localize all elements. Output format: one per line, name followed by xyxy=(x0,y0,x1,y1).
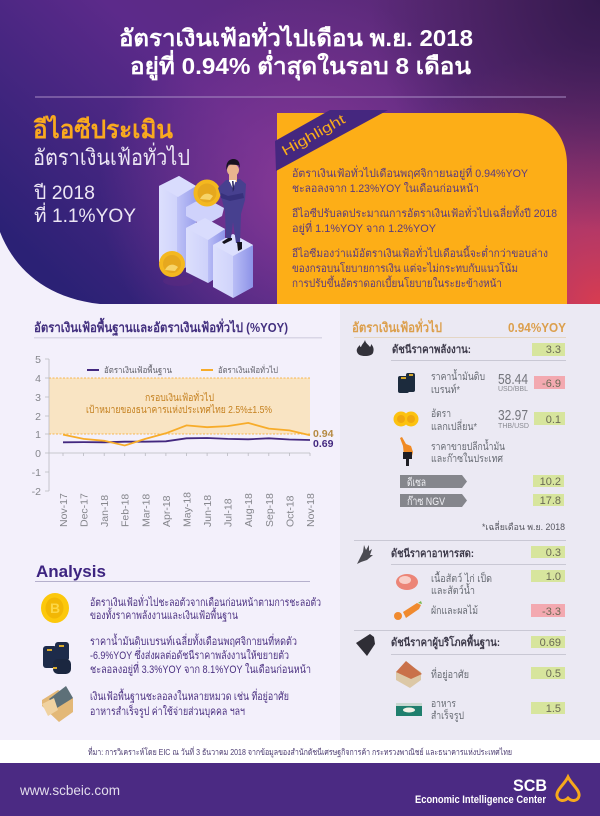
icon: scb logo xyxy=(557,777,579,800)
breakdown heading xyxy=(352,318,566,338)
x axis labels: Jul-18 xyxy=(223,498,235,527)
energy: diesel: 10.2 xyxy=(540,476,561,488)
energy: brent crude: เบรนท์* xyxy=(431,383,460,396)
chart heading: อัตราเงินเฟ้อพื้นฐานและอัตราเงินเฟ้อทั่วไป (%YOY) xyxy=(34,317,288,337)
x axis labels: Feb-18 xyxy=(120,494,132,527)
core: prepared food: 1.5 xyxy=(546,703,561,715)
core: prepared food: สำเร็จรูป xyxy=(431,708,464,722)
x axis labels: Aug-18 xyxy=(243,493,255,527)
highlight text: อัตราเงินเฟ้อทั่วไปเดือนพฤศจิกายนอยู่ที่ 0.94%YOY xyxy=(292,165,529,180)
highlight text xyxy=(292,165,557,290)
breakdown heading: 0.94%YOY xyxy=(508,320,566,335)
core section header xyxy=(356,634,566,656)
source note xyxy=(0,740,600,763)
x axis labels: Sep-18 xyxy=(264,493,276,527)
core: housing: ที่อยู่อาศัย xyxy=(431,667,469,681)
energy: exchange rate: แลกเปลี่ยน* xyxy=(431,419,477,433)
x axis labels: Mar-18 xyxy=(140,494,152,527)
value labels: 0.94 xyxy=(313,428,334,440)
energy: ngv: 17.8 xyxy=(540,495,561,507)
y axis labels: -1 xyxy=(32,467,41,479)
x axis labels: May-18 xyxy=(182,492,194,527)
footer xyxy=(0,763,600,816)
ribbon: highlight: Highlight xyxy=(279,111,348,159)
footnote: *เฉลี่ยเดือน พ.ย. 2018 xyxy=(482,520,565,532)
analysis text 1: ของทั้งราคาพลังงานและเงินเฟ้อพื้นฐาน xyxy=(90,607,238,622)
core: housing: 0.5 xyxy=(546,668,561,680)
food: meat: และสัตว์น้ำ xyxy=(431,583,475,597)
illustration: businessman on columns xyxy=(159,159,253,298)
highlight text: การปรับขึ้นอัตราดอกเบี้ยนโยบายในระยะข้างหน้า xyxy=(292,275,502,290)
x axis labels: Jan-18 xyxy=(99,495,111,527)
x axis labels: Oct-18 xyxy=(284,495,296,527)
core section header: 0.69 xyxy=(540,637,561,649)
series: core inflation xyxy=(63,438,310,442)
title: อัตราเงินเฟ้อทั่วไปเดือน พ.ย. 2018 xyxy=(119,21,473,51)
band label: เป้าหมายของธนาคารแห่งประเทศไทย 2.5%±1.5% xyxy=(86,404,272,416)
highlight text: ของกรอบนโยบายการเงิน แต่จะไม่กระทบกับแนวโน้ม xyxy=(292,261,518,275)
ribbon: highlight xyxy=(275,110,388,171)
eic forecast text xyxy=(33,114,190,227)
food: vegetables xyxy=(394,601,565,620)
y axis labels: 1 xyxy=(35,429,41,441)
right panel background xyxy=(340,304,600,740)
y axis labels: -2 xyxy=(32,486,41,498)
energy: retail fuel: และก๊าซในประเทศ xyxy=(431,452,503,465)
analysis text 2 xyxy=(90,633,311,676)
x axis labels xyxy=(58,492,317,527)
scb wordmark xyxy=(415,777,547,806)
y axis labels: 2 xyxy=(35,411,41,423)
y axis labels xyxy=(32,354,41,498)
analysis text 1: อัตราเงินเฟ้อทั่วไปชะลอตัวจากเดือนก่อนหน้าตามการชะลอตัว xyxy=(90,594,321,609)
y axis labels: 3 xyxy=(35,392,41,404)
icon: oil barrels xyxy=(43,642,71,674)
x axis labels: Jun-18 xyxy=(202,495,214,527)
analysis text 2: ชะลอลงอยู่ที่ 3.3%YOY จาก 8.1%YOY ในเดือนก่อนหน้า xyxy=(90,661,311,676)
core section header: ดัชนีราคาผู้บริโภคพื้นฐาน: xyxy=(391,634,500,650)
energy: exchange rate: 32.97 xyxy=(498,407,528,424)
energy: retail fuel xyxy=(400,437,505,466)
food: meat xyxy=(396,570,565,597)
band label: กรอบเงินเฟ้อทั่วไป xyxy=(145,390,214,404)
food: meat: เนื้อสัตว์ ไก่ เป็ด xyxy=(431,571,492,585)
energy: exchange rate: อัตรา xyxy=(431,408,451,420)
energy: brent crude: -6.9 xyxy=(542,378,561,390)
title: อยู่ที่ 0.94% ต่ำสุดในรอบ 8 เดือน xyxy=(130,49,471,81)
eic forecast text: อัตราเงินเฟ้อทั่วไป xyxy=(33,142,190,170)
energy section header: 3.3 xyxy=(546,344,561,356)
value labels: 0.69 xyxy=(313,438,334,450)
series: headline inflation xyxy=(63,423,310,446)
header background xyxy=(0,0,600,304)
panel: inflation breakdown xyxy=(352,318,566,722)
breakdown heading: อัตราเงินเฟ้อทั่วไป xyxy=(352,318,442,335)
fresh food section header: 0.3 xyxy=(546,547,561,559)
y axis labels: 0 xyxy=(35,448,41,460)
title xyxy=(119,21,473,81)
energy: brent crude xyxy=(398,369,565,396)
food: vegetables: ผักและผลไม้ xyxy=(431,604,478,617)
energy: diesel xyxy=(400,475,564,489)
y axis labels: 4 xyxy=(35,373,41,385)
eic forecast text: ปี 2018 xyxy=(33,182,95,204)
legend: อัตราเงินเฟ้อทั่วไป xyxy=(218,364,278,375)
panel: highlight xyxy=(275,110,567,304)
fresh food section header xyxy=(357,545,566,565)
energy: ngv: ก๊าซ NGV xyxy=(407,495,446,508)
highlight text: ชะลอลงจาก 1.23%YOY ในเดือนก่อนหน้า xyxy=(292,182,479,195)
highlight text: อยู่ที่ 1.1%YOY จาก 1.2%YOY xyxy=(292,220,437,235)
energy: exchange rate: THB/USD xyxy=(498,423,529,430)
energy: brent crude: ราคาน้ำมันดิบ xyxy=(431,369,485,383)
icon: coin upper xyxy=(194,180,220,206)
fresh food section header: ดัชนีราคาอาหารสด: xyxy=(391,547,474,560)
core: prepared food: อาหาร xyxy=(431,698,456,710)
icon: baht coin xyxy=(41,593,69,623)
icon: house xyxy=(42,686,73,722)
panel: analysis: Analysis xyxy=(36,562,106,581)
icon: coin lower xyxy=(159,251,193,286)
core: housing xyxy=(396,661,565,688)
y axis labels: 5 xyxy=(35,354,41,366)
x axis labels: Nov-17 xyxy=(58,493,70,527)
energy: brent crude: USD/BBL xyxy=(498,386,528,393)
food: meat: 1.0 xyxy=(546,571,561,583)
x axis labels: Apr-18 xyxy=(161,495,173,527)
energy: exchange rate: 0.1 xyxy=(546,414,561,426)
analysis text 3: อาหารสำเร็จรูป ค่าใช้จ่ายส่วนบุคคล ฯลฯ xyxy=(90,704,245,718)
eic forecast text: อีไอซีประเมิน xyxy=(33,114,173,144)
x axis labels: Dec-17 xyxy=(79,493,91,527)
legend: อัตราเงินเฟ้อพื้นฐาน xyxy=(104,364,172,376)
band label xyxy=(86,390,272,416)
source note: ที่มา: การวิเคราะห์โดย EIC ณ วันที่ 3 ธันวาคม 2018 จากข้อมูลของสำนักดัชนีเศรษฐกิจการค้า กระทรวงพาณิชย์ และธนาคารแห่งประเทศไทย xyxy=(88,746,512,758)
highlight text: อีไอซีปรับลดประมาณการอัตราเงินเฟ้อทั่วไปเฉลี่ยทั้งปี 2018 xyxy=(292,205,557,220)
panel: analysis xyxy=(35,562,321,722)
scb wordmark: SCB xyxy=(513,777,547,795)
header rule xyxy=(35,96,566,98)
analysis text 3 xyxy=(90,688,289,718)
analysis text 1 xyxy=(90,594,321,622)
line chart xyxy=(32,354,334,527)
legend xyxy=(87,364,278,376)
energy: diesel: ดีเซล xyxy=(407,476,426,489)
energy section header xyxy=(357,340,566,361)
energy section header: ดัชนีราคาพลังงาน: xyxy=(392,343,471,356)
website: www.scbeic.com xyxy=(19,783,120,798)
energy: retail fuel: ราคาขายปลีกน้ำมัน xyxy=(431,439,505,453)
eic forecast text: ที่ 1.1%YOY xyxy=(34,202,136,227)
energy: exchange rate xyxy=(394,407,565,433)
energy: brent crude: 58.44 xyxy=(498,371,528,388)
value labels xyxy=(313,428,334,450)
energy: ngv xyxy=(400,494,564,508)
x axis labels: Nov-18 xyxy=(305,493,317,527)
scb wordmark: Economic Intelligence Center xyxy=(415,794,547,806)
icon: baht coin: B xyxy=(50,600,60,616)
core: prepared food xyxy=(396,698,565,722)
analysis text 3: เงินเฟ้อพื้นฐานชะลอลงในหลายหมวด เช่น ที่อยู่อาศัย xyxy=(90,688,289,703)
figure: man in suit xyxy=(218,159,246,251)
food: vegetables: -3.3 xyxy=(542,606,561,618)
analysis text 2: ราคาน้ำมันดิบเบรนท์เฉลี่ยทั้งเดือนพฤศจิกายนที่หดตัว xyxy=(90,633,297,648)
highlight text: อีไอซีมองว่าแม้อัตราเงินเฟ้อทั่วไปเดือนนี้จะต่ำกว่าขอบล่าง xyxy=(292,245,548,260)
analysis text 2: -6.9%YOY ซึ่งส่งผลต่อดัชนีราคาพลังงานให้ขยายตัว xyxy=(90,647,289,662)
